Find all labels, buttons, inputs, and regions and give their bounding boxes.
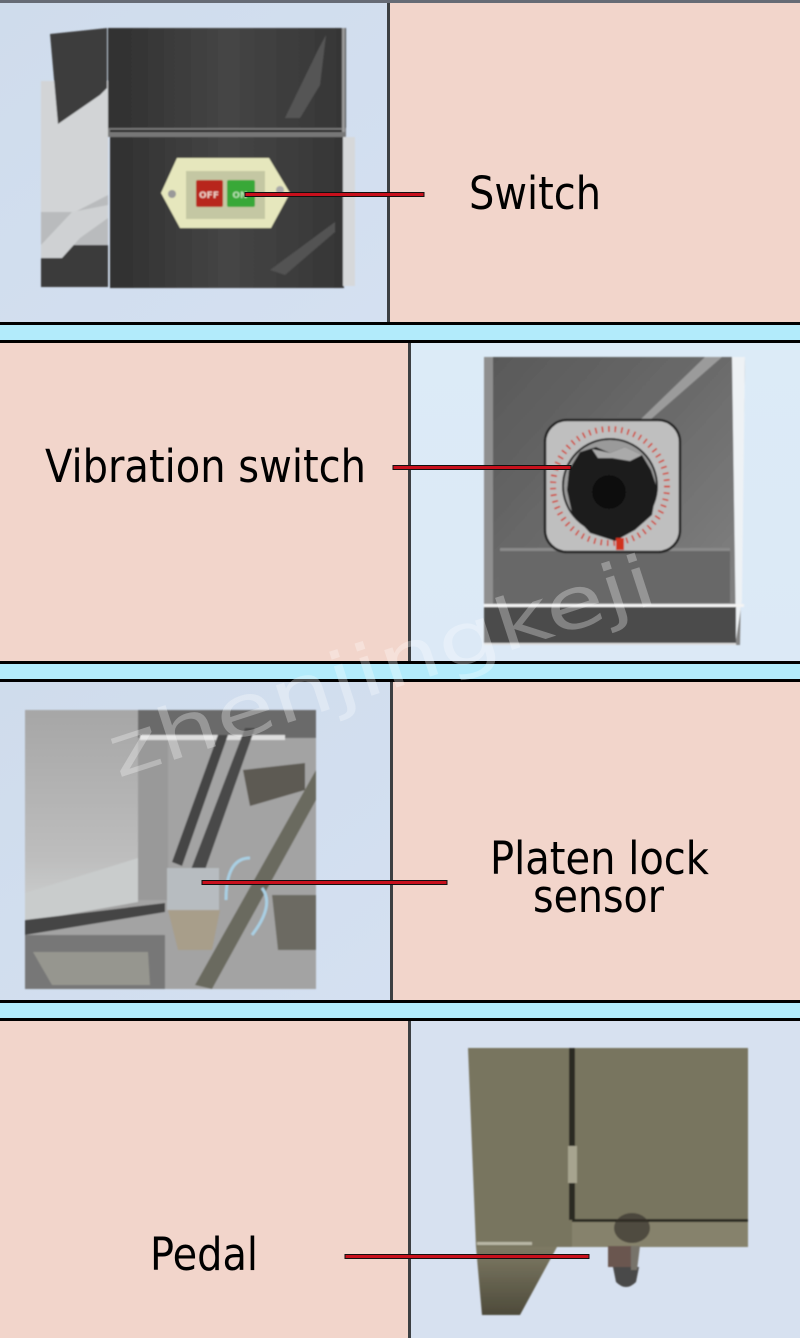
label: vibration switch: Vibration switch bbox=[45, 440, 366, 493]
switch plate: ON bbox=[232, 191, 248, 201]
panel: pedal bbox=[0, 1021, 800, 1338]
photo: vibration dial bbox=[484, 357, 745, 645]
label: platen lock sensor bbox=[490, 832, 709, 923]
pointer line: sensor bbox=[202, 880, 447, 884]
pointer line: vibration bbox=[393, 466, 571, 470]
label: platen lock sensor: Platen lock bbox=[490, 832, 709, 885]
label: switch: Switch bbox=[469, 167, 601, 220]
photo: pedal cabinet bbox=[468, 1048, 748, 1315]
pointer line: pedal bbox=[345, 1254, 589, 1258]
pointer line: switch bbox=[245, 192, 424, 196]
watermark: zhenjingkeji bbox=[97, 538, 665, 794]
photo: sensor bbox=[25, 710, 316, 989]
switch plate bbox=[161, 158, 290, 228]
switch plate: OFF bbox=[199, 191, 219, 201]
panel: switch bbox=[0, 3, 800, 322]
label: pedal: Pedal bbox=[150, 1228, 258, 1281]
label: platen lock sensor: sensor bbox=[533, 870, 664, 923]
panel: vibration switch bbox=[0, 343, 800, 661]
panel: platen lock sensor bbox=[0, 682, 800, 1000]
dial face bbox=[545, 420, 680, 552]
photo: switch box bbox=[41, 28, 355, 288]
